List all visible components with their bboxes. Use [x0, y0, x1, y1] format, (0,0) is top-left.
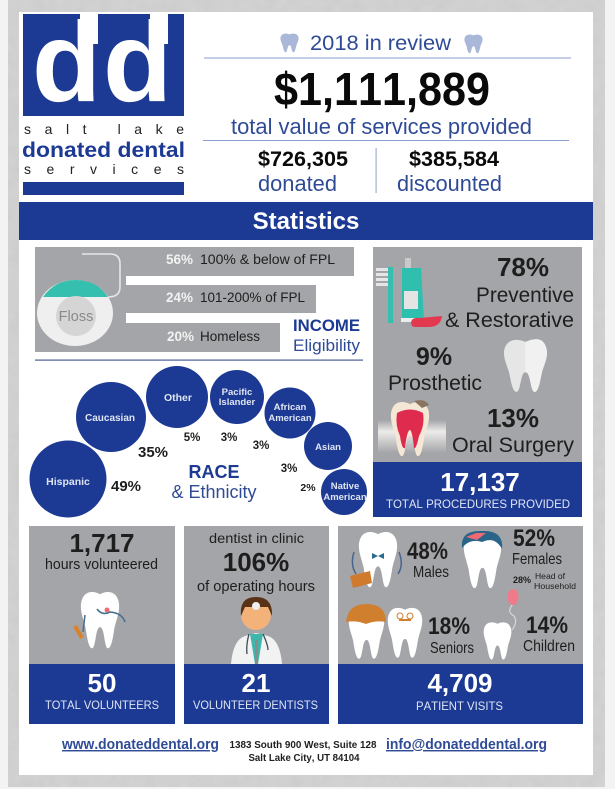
volunteer dentists: 21 — [242, 668, 270, 698]
panel: income eligibility — [35, 247, 360, 355]
discounted amount — [397, 148, 502, 196]
icon: right tooth — [464, 35, 483, 53]
bubble Native American: Native — [331, 481, 359, 492]
website: www.donateddental.org — [61, 737, 219, 753]
bubble Native American: American — [323, 492, 367, 503]
text: 13% oral surgery — [452, 403, 574, 457]
text: 18% seniors: 18% — [428, 613, 470, 640]
panel: dentists — [184, 526, 329, 724]
bubble Caucasian: Caucasian — [85, 413, 135, 424]
total value headline — [231, 63, 532, 139]
logo: salt lake donated dental services — [22, 0, 185, 195]
text: hours volunteered: hours volunteered — [45, 557, 158, 573]
race heading: RACE — [188, 462, 240, 482]
income row 20% — [167, 329, 260, 344]
bubble Other: Other — [164, 392, 192, 404]
text: hours volunteered: 1,717 — [69, 528, 135, 558]
logo: salt lake donated dental services: dd — [32, 0, 174, 125]
icon: senior teeth — [346, 604, 422, 659]
icon: tooth cross-section — [378, 400, 446, 456]
total volunteers: 50 — [88, 668, 116, 698]
bubble Pacific Islander: Pacific — [222, 387, 252, 398]
race percentages: 3% — [253, 440, 269, 452]
patient visits — [416, 668, 503, 713]
icon: dentist — [231, 597, 282, 664]
bubble Pacific Islander — [210, 370, 264, 424]
volunteer dentists: VOLUNTEER DENTISTS — [193, 698, 318, 712]
icon: toothbrush and toothpaste — [376, 258, 442, 327]
race percentages: 3% — [281, 463, 297, 475]
income row 20%: 20% — [167, 329, 194, 344]
patient visits: PATIENT VISITS — [416, 699, 503, 713]
total procedures: TOTAL PROCEDURES PROVIDED — [386, 497, 570, 511]
header: 2018 in review — [280, 32, 483, 55]
text: 52% females: Head of — [535, 571, 566, 581]
text: 48% males — [407, 538, 449, 581]
income heading: Eligibility — [293, 336, 360, 355]
text: 48% males: 48% — [407, 538, 448, 565]
icon: child tooth with balloon — [484, 589, 518, 660]
statistics banner: Statistics — [253, 208, 359, 235]
logo: salt lake donated dental services: services — [24, 161, 184, 177]
panel: procedures — [373, 247, 582, 517]
total volunteers — [45, 668, 159, 712]
text: 18% seniors — [428, 613, 474, 657]
total procedures — [386, 467, 570, 511]
donated amount: donated — [258, 171, 337, 196]
logo: salt lake donated dental services: salt lake — [24, 121, 184, 137]
income bars — [35, 247, 354, 352]
race heading: & Ethnicity — [171, 482, 257, 502]
bubble Hispanic — [30, 440, 106, 518]
panel: volunteers — [29, 526, 175, 724]
text: 9% prosthetic — [388, 343, 482, 395]
address: Salt Lake City, UT 84104 — [248, 753, 360, 764]
race percentages: 2% — [300, 482, 316, 494]
discounted amount: discounted — [397, 171, 502, 196]
bubble Pacific Islander: Islander — [219, 397, 256, 408]
total value headline: total value of services provided — [231, 114, 532, 139]
race percentages — [111, 432, 316, 495]
text: 13% oral surgery: 13% — [487, 403, 539, 433]
bubble African American — [264, 388, 316, 438]
text: 48% males: Males — [413, 564, 449, 581]
text: 14% children — [523, 612, 575, 655]
header: 2018 in review: 2018 in review — [310, 32, 452, 55]
bubble Native American — [321, 469, 367, 515]
income row 56%: 56% — [166, 252, 193, 267]
text: 52% females: 52% — [513, 525, 555, 552]
icon: male tooth — [350, 532, 401, 588]
logo: salt lake donated dental services: donated dental — [22, 138, 185, 162]
icon: floss — [37, 254, 120, 346]
income row 24%: 24% — [166, 290, 193, 305]
donated amount: $726,305 — [258, 148, 348, 171]
total procedures: 17,137 — [440, 467, 520, 497]
text: hours volunteered — [45, 528, 158, 573]
address: 1383 South 900 West, Suite 128 — [230, 740, 377, 751]
text: 9% prosthetic: Prosthetic — [388, 371, 482, 395]
text: dentist in clinic: of operating hours — [197, 579, 315, 595]
income row 56%: 100% & below of FPL — [200, 252, 336, 267]
text: dentist in clinic — [197, 530, 315, 595]
text: 78% preventive and restorative: & Restorative — [445, 308, 574, 332]
total volunteers: TOTAL VOLUNTEERS — [45, 698, 159, 712]
icon: smiling tooth with floss — [75, 592, 125, 648]
bubble Asian — [304, 422, 352, 470]
race percentages: 35% — [138, 444, 168, 461]
statistics banner — [19, 202, 593, 240]
bubble Asian: Asian — [315, 442, 341, 453]
text: dentist in clinic: 106% — [223, 547, 289, 577]
patient visits: 4,709 — [427, 668, 493, 698]
bubble African American: American — [268, 413, 312, 424]
total value headline: $1,111,889 — [274, 63, 490, 115]
email: info@donateddental.org — [386, 737, 547, 753]
text: 14% children: 14% — [526, 612, 568, 639]
text: 78% preventive and restorative — [445, 252, 574, 332]
text: 78% preventive and restorative: Preventive — [476, 283, 574, 307]
footer contact — [61, 737, 547, 764]
bubble Hispanic: Hispanic — [46, 476, 90, 488]
text: 52% females: Females — [512, 551, 562, 568]
text: 78% preventive and restorative: 78% — [497, 252, 549, 282]
bubble Other — [146, 366, 208, 428]
icon: floss: Floss — [59, 309, 93, 325]
text: 14% children: Children — [523, 638, 575, 655]
address — [230, 740, 377, 764]
volunteer dentists — [193, 668, 318, 712]
donated amount — [258, 148, 348, 196]
text: 13% oral surgery: Oral Surgery — [452, 433, 574, 457]
race percentages: 49% — [111, 478, 141, 495]
panel: race and ethnicity bubbles — [30, 366, 367, 518]
icon: white tooth — [504, 339, 547, 392]
discounted amount: $385,584 — [409, 148, 499, 171]
text: 52% females: 28% — [513, 575, 531, 585]
text: 52% females: Household — [534, 581, 576, 591]
text: 18% seniors: Seniors — [430, 640, 474, 657]
text: dentist in clinic: dentist in clinic — [209, 530, 304, 546]
text: 9% prosthetic: 9% — [416, 343, 452, 371]
race heading — [171, 462, 257, 502]
bubble African American: African — [274, 402, 307, 413]
panel: patients — [338, 525, 583, 724]
bubble Caucasian — [76, 382, 146, 452]
income heading: INCOME — [293, 316, 360, 335]
income heading — [293, 316, 360, 355]
icon: female tooth — [462, 531, 502, 588]
income row 24%: 101-200% of FPL — [200, 290, 305, 305]
text: 52% females — [512, 525, 576, 591]
race percentages: 5% — [184, 432, 200, 444]
race percentages: 3% — [221, 432, 237, 444]
icon: left tooth — [280, 34, 299, 52]
income row 20%: Homeless — [200, 329, 260, 344]
